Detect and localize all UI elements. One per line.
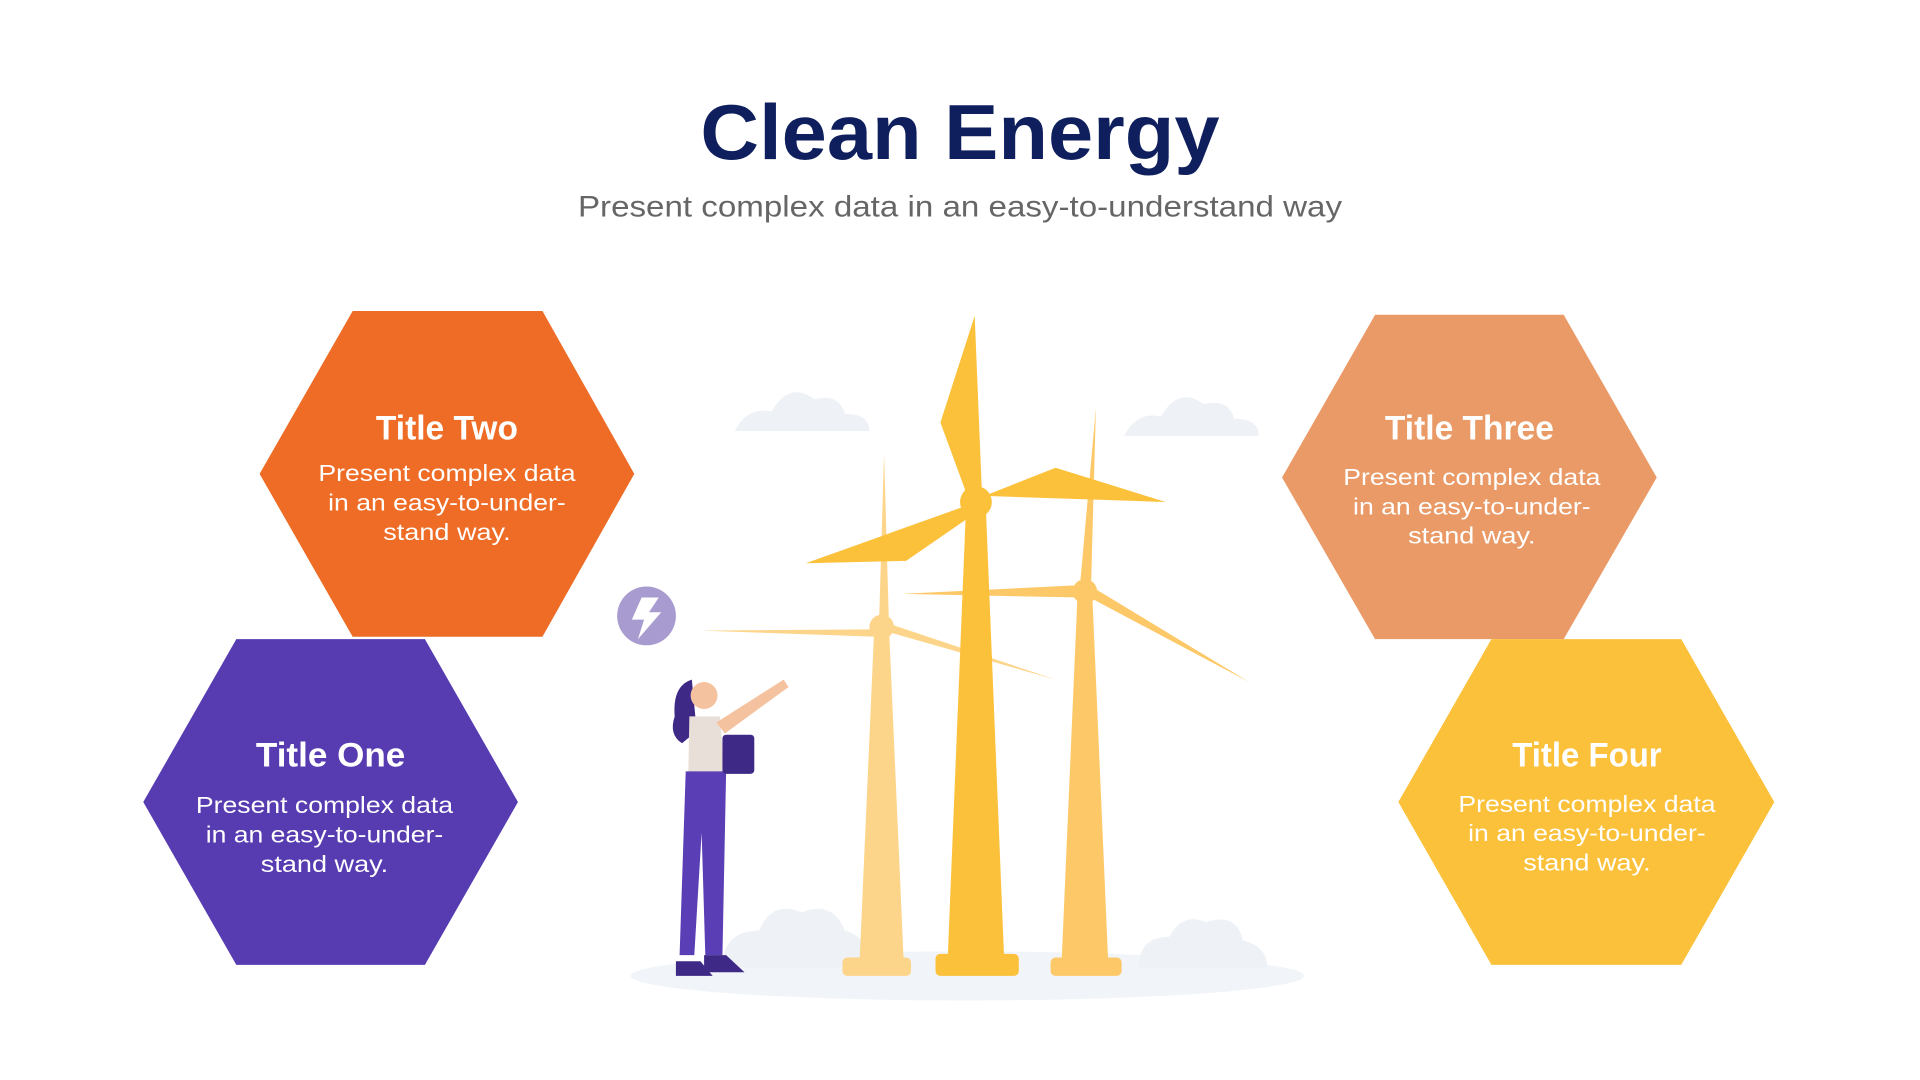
subtitle: Present complex data in an easy-to-understand way [578, 191, 1342, 224]
panel: title four [1398, 639, 1774, 965]
person [673, 680, 789, 976]
panel: title one [143, 639, 518, 965]
panel: title two [260, 311, 634, 637]
panel: title two: Present complex data [318, 460, 576, 486]
icon: lightning bolt [617, 587, 676, 645]
panel: title two: Title Two [376, 410, 518, 448]
panel: title one: Title One [256, 737, 405, 775]
panel: title three: Present complex data [1343, 464, 1600, 490]
right turbine [901, 408, 1249, 976]
center turbine [806, 316, 1166, 976]
panel: title three: Title Three [1385, 410, 1554, 448]
panel: title one: in an easy-to-under- [206, 821, 443, 847]
panel: title four: in an easy-to-under- [1468, 820, 1706, 846]
panel: title four: Present complex data [1458, 791, 1716, 817]
left turbine [700, 453, 1056, 976]
panel: title four: stand way. [1523, 850, 1651, 876]
illustration: wind turbines [631, 316, 1304, 1000]
panel: title two: in an easy-to-under- [328, 490, 566, 516]
panel: title two: stand way. [383, 519, 511, 545]
panel: title three [1282, 315, 1657, 639]
panel: title four: Title Four [1512, 737, 1662, 775]
panel: title three: in an easy-to-under- [1353, 493, 1591, 519]
title: Clean Energy [700, 88, 1220, 176]
panel: title one: stand way. [261, 851, 388, 877]
panel: title one: Present complex data [196, 792, 453, 818]
panel: title three: stand way. [1408, 523, 1536, 549]
